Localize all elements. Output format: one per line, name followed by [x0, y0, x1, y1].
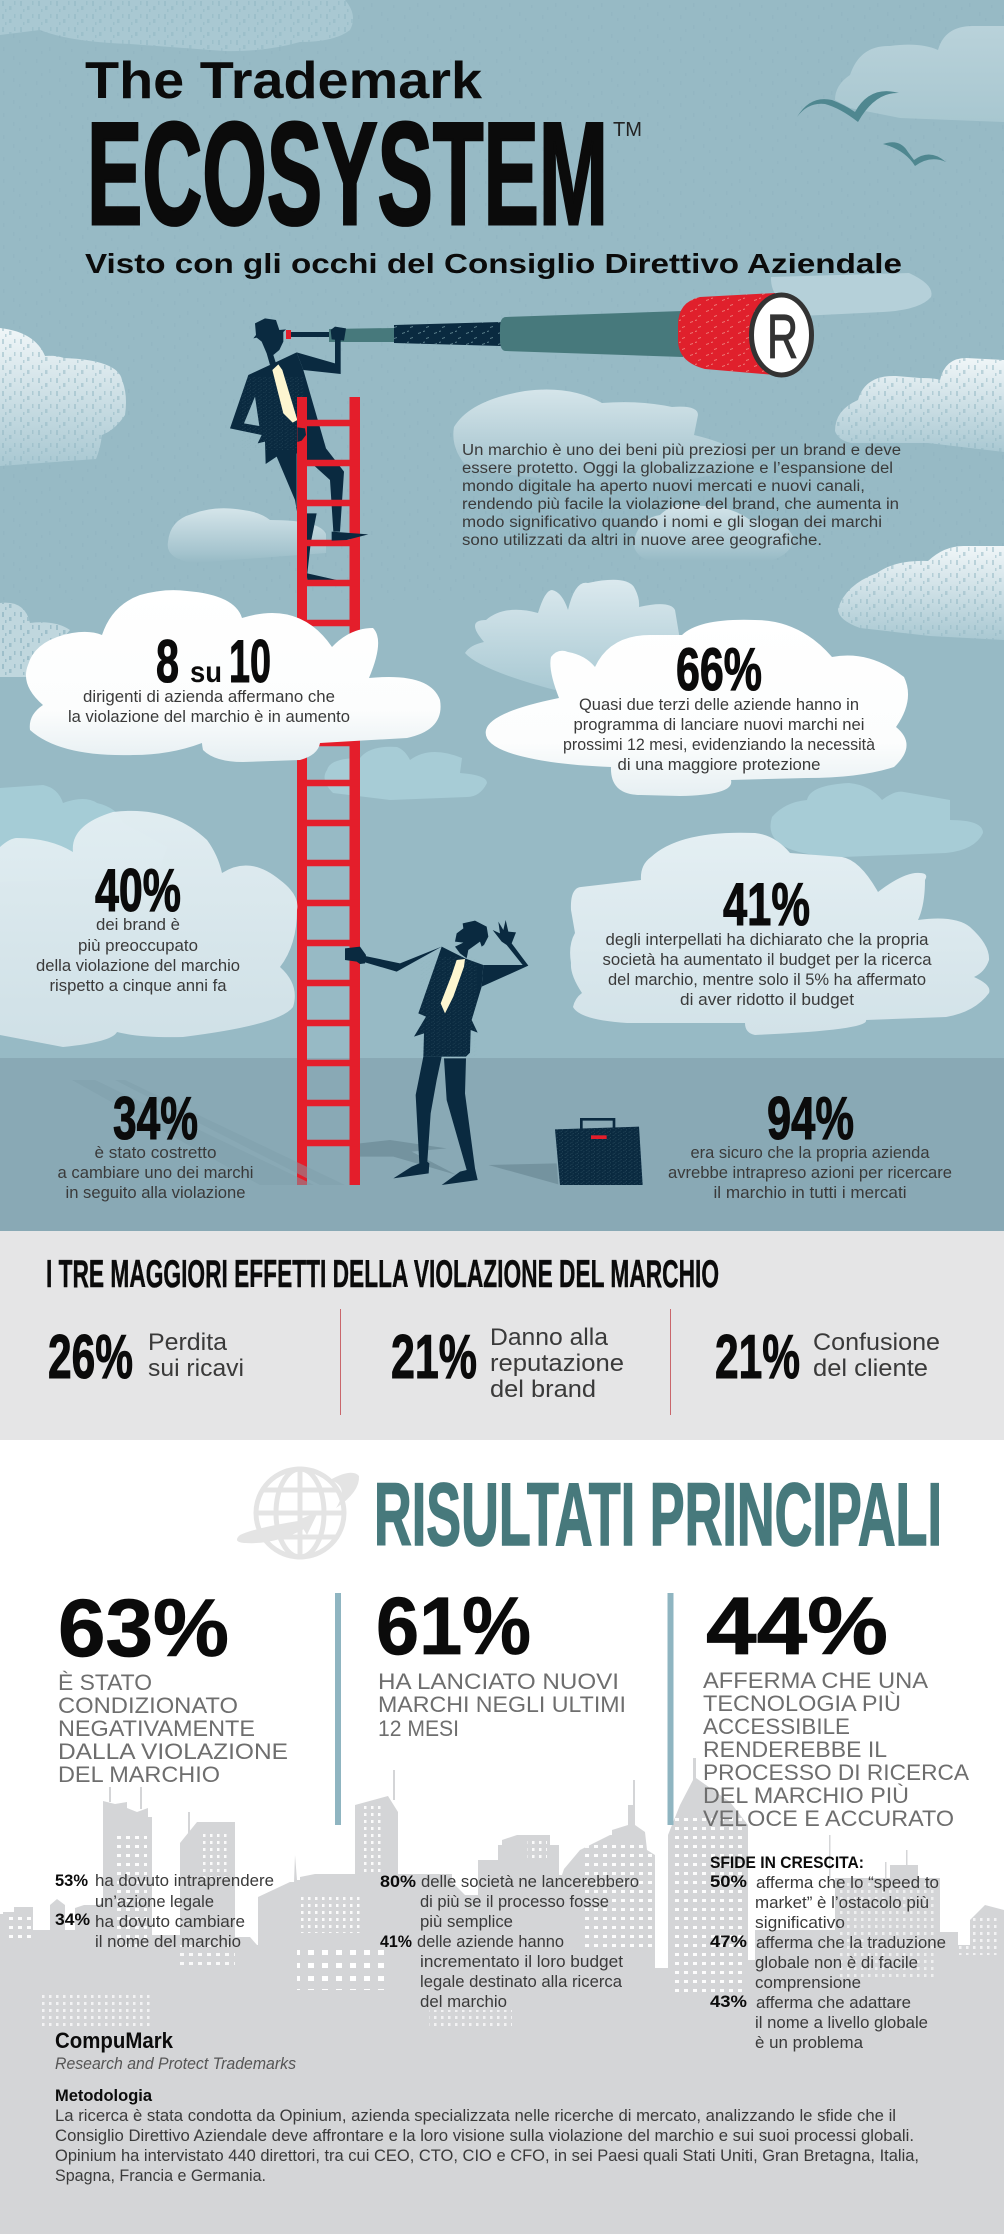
details: launches and budget: 41%: [380, 1933, 412, 1951]
man shadow: [360, 1140, 558, 1184]
column: 44 percent: DEL MARCHIO PIÙ: [703, 1783, 909, 1808]
column: 63 percent: [58, 1583, 288, 1787]
hand on ladder: [345, 947, 366, 964]
briefcase handle: [581, 1119, 614, 1129]
column: 63 percent: NEGATIVAMENTE: [58, 1716, 255, 1741]
hand on ladder: [297, 427, 306, 442]
cloud: pale behind ladder: [325, 747, 487, 800]
foot on rung: [332, 532, 368, 541]
stat: 66 percent: Quasi due terzi delle aziende hanno in: [579, 696, 859, 714]
stat: 41 percent: degli interpellati ha dichiarato che la propria: [606, 931, 929, 949]
man with telescope: [230, 318, 346, 580]
column dividers: [335, 1593, 674, 1825]
red barrel: [678, 293, 775, 375]
raised arm: [297, 339, 341, 374]
cloud: right middle: [835, 358, 1004, 452]
ladder rails: [297, 397, 360, 1185]
title block: [85, 52, 902, 279]
bird: large: [797, 91, 899, 122]
stat: 8 su 10: 8: [156, 628, 179, 695]
white results background: [0, 1440, 1004, 2234]
cloud: 40 percent: [0, 811, 297, 1047]
details: launches and budget: legale destinato alla ricerca: [420, 1973, 623, 1991]
registered letter: R: [767, 303, 798, 372]
details: growing challenges: afferma che adattare: [756, 1994, 911, 2012]
details: growing challenges: globale non è di facile: [755, 1954, 918, 1972]
column: 63 percent: DEL MARCHIO: [58, 1762, 220, 1787]
stat: 8 su 10: dirigenti di azienda affermano che: [83, 688, 335, 706]
details: growing challenges: 50%: [710, 1873, 747, 1891]
cloud: left side: [0, 328, 126, 466]
effect: reputation damage: del brand: [490, 1376, 596, 1403]
column: 44 percent: VELOCE E ACCURATO: [703, 1806, 954, 1831]
stat: 66 percent: programma di lanciare nuovi marchi nei: [574, 716, 864, 734]
stat: 40 percent: più preoccupato: [78, 937, 198, 955]
effect: revenue loss: [48, 1323, 244, 1392]
logo: CompuMark: CompuMark: [55, 2028, 174, 2053]
column: 44 percent: 44%: [706, 1581, 888, 1672]
details: launches and budget: [380, 1873, 639, 2011]
methodology: La ricerca è stata condotta da Opinium, azienda specializzata nelle ricerche di mercato, analizzando le sfide che il: [55, 2107, 896, 2125]
stat: 40 percent: 40%: [95, 857, 181, 924]
first man foot and hand over ladder: [297, 427, 368, 541]
effect: revenue loss: 26%: [48, 1323, 133, 1392]
tube segment 2: [394, 322, 501, 346]
stat: 94 percent: 94%: [767, 1085, 854, 1152]
effect: revenue loss: sui ricavi: [148, 1355, 244, 1382]
details: launches and budget: più semplice: [420, 1913, 513, 1931]
stat: 94 percent: il marchio in tutti i mercati: [714, 1184, 906, 1202]
divider: [670, 1309, 671, 1415]
intro paragraph: modo significativo quando i nomi e gli slogan dei marchi: [462, 514, 882, 531]
stat: 41 percent: società ha aumentato il budget per la ricerca: [602, 951, 932, 969]
stat: 8 su 10: [68, 628, 350, 726]
column: 61 percent: 61%: [376, 1581, 531, 1672]
briefcase: [555, 1127, 643, 1185]
icon: globe: [237, 1469, 359, 1557]
effect: customer confusion: 21%: [715, 1323, 800, 1392]
legs: [393, 1057, 478, 1185]
details: growing challenges: afferma che lo “speed to: [756, 1874, 939, 1892]
cloud: behind 66 percent: [465, 580, 680, 690]
stat: 66 percent: 66%: [676, 636, 762, 703]
stat: 34 percent: 34%: [113, 1085, 198, 1152]
details: growing challenges: SFIDE IN CRESCITA:: [710, 1854, 864, 1872]
details: growing challenges: significativo: [755, 1914, 845, 1932]
column: 61 percent: MARCHI NEGLI ULTIMI: [378, 1692, 626, 1717]
cloud: under subtitle: [771, 273, 932, 316]
details: launches and budget: 80%: [380, 1873, 416, 1891]
background clouds: [0, 0, 1004, 882]
intro paragraph: mondo digitale ha aperto nuovi mercati e nuovi canali,: [462, 478, 865, 495]
intro paragraph: Un marchio è uno dei beni più preziosi per un brand e deve: [462, 442, 901, 459]
briefcase clasp: [591, 1135, 607, 1139]
ladder rungs: [297, 423, 360, 1143]
logo: CompuMark: [55, 2028, 296, 2073]
ladder: [297, 397, 360, 1185]
stat: 40 percent: [36, 857, 240, 995]
orbit upper: [330, 1473, 359, 1508]
stat: 41 percent: [602, 871, 932, 1009]
cloud: behind paragraph: [453, 390, 736, 490]
eyepiece: [286, 330, 291, 339]
stat: 66 percent: di una maggiore protezione: [618, 756, 820, 774]
details: growing challenges: il nome a livello globale: [755, 2014, 928, 2032]
tube segment 3: [500, 311, 683, 357]
intro paragraph: rendendo più facile la violazione del brand, che aumenta in: [462, 496, 899, 513]
orbit lower and arrow: [237, 1512, 318, 1543]
antennas: [109, 1770, 908, 1878]
details: legal action: ha dovuto cambiare: [95, 1913, 245, 1931]
details: growing challenges: comprensione: [755, 1974, 861, 1992]
stat: 8 su 10: 10: [229, 628, 271, 695]
birds: [797, 91, 946, 166]
raised hand and arm: [482, 920, 528, 987]
column: 44 percent: [703, 1581, 969, 1831]
registered mark lens: [752, 295, 812, 375]
hand: [331, 327, 346, 341]
details: legal action: ha dovuto intraprendere: [95, 1872, 274, 1890]
details: legal action: un’azione legale: [95, 1893, 214, 1911]
column: 44 percent: AFFERMA CHE UNA: [703, 1668, 928, 1693]
details: growing challenges: afferma che la traduzione: [756, 1934, 946, 1952]
column: 44 percent: RENDEREBBE IL: [703, 1737, 887, 1762]
jacket and legs: [230, 352, 344, 580]
methodology: Metodologia: [55, 2087, 153, 2105]
effect: reputation damage: reputazione: [490, 1350, 624, 1377]
tie: [441, 959, 465, 1013]
stat: 66 percent: prossimi 12 mesi, evidenziando la necessità: [563, 736, 876, 754]
building windows: [7, 1805, 998, 2027]
effect: customer confusion: [715, 1323, 940, 1392]
details: growing challenges: [710, 1854, 946, 2052]
column: 61 percent: HA LANCIATO NUOVI: [378, 1669, 619, 1694]
left arm: [365, 947, 442, 972]
details: growing challenges: è un problema: [755, 2034, 864, 2052]
tube segment 1: [329, 328, 394, 342]
column: 63 percent: È STATO: [58, 1670, 152, 1695]
effect: customer confusion: Confusione: [813, 1329, 940, 1356]
effect: reputation damage: Danno alla: [490, 1324, 609, 1351]
stat: 40 percent: dei brand è: [96, 916, 180, 934]
methodology: Opinium ha intervistato 440 direttori, tra cui CEO, CTO, CIO e CFO, in sei Paesi quali Stati Uniti, Gran Bretagna, Italia,: [55, 2147, 919, 2165]
stat: 94 percent: avrebbe intrapreso azioni per ricercare: [668, 1164, 952, 1182]
stat: 34 percent: a cambiare uno dei marchi: [58, 1164, 254, 1182]
details: launches and budget: delle aziende hanno: [417, 1933, 564, 1951]
stat: 40 percent: della violazione del marchio: [36, 957, 240, 975]
details: legal action: 34%: [55, 1911, 90, 1929]
hat and head: [455, 921, 488, 958]
trademark sign: TM: [613, 119, 642, 141]
bird: small: [883, 142, 946, 166]
ladder shadow: [72, 1080, 345, 1185]
details: legal action: [55, 1872, 274, 1951]
effect: customer confusion: del cliente: [813, 1355, 928, 1382]
cloud: 41 percent: [570, 833, 989, 1035]
column: 44 percent: PROCESSO DI RICERCA: [703, 1760, 969, 1785]
stat: 94 percent: [668, 1085, 952, 1202]
column: 44 percent: ACCESSIBILE: [703, 1714, 850, 1739]
city skyline: [0, 1758, 1004, 2234]
methodology: Consiglio Direttivo Aziendale deve affrontare e la loro visione sulla violazione del marchio e sui suoi processi globali.: [55, 2127, 914, 2145]
cloud: below paragraph: [634, 504, 794, 561]
logo: CompuMark: Research and Protect Trademarks: [55, 2054, 296, 2073]
telescope: [286, 293, 812, 375]
details: launches and budget: incrementato il loro budget: [420, 1953, 623, 1971]
cloud: top left: [0, 0, 353, 51]
effect: reputation damage: 21%: [391, 1323, 477, 1392]
sky texture: [0, 0, 1004, 600]
subtitle: Visto con gli occhi del Consiglio Direttivo Aziendale: [85, 248, 902, 279]
column: 44 percent: TECNOLOGIA PIÙ: [703, 1691, 901, 1716]
cloud: right lower: [838, 546, 1004, 640]
title line 1: The Trademark: [85, 52, 482, 110]
stat: 41 percent: di aver ridotto il budget: [680, 991, 854, 1009]
intro paragraph: sono utilizzati da altri in nuove aree geografiche.: [462, 532, 822, 549]
stat: 40 percent: rispetto a cinque anni fa: [50, 977, 227, 995]
stat: 41 percent: del marchio, mentre solo il 5% ha affermato: [608, 971, 926, 989]
cloud: upper right: [835, 26, 1004, 122]
cloud: 8 su 10: [26, 590, 441, 762]
ground band: [0, 1058, 1004, 1231]
stat: 34 percent: è stato costretto: [94, 1144, 216, 1162]
cloud: left small: [0, 603, 70, 677]
arm gap: [244, 397, 259, 426]
torso: [414, 947, 483, 1057]
title line 2: ECOSYSTEM: [87, 92, 608, 255]
details: launches and budget: del marchio: [420, 1993, 507, 2011]
tie: [272, 364, 297, 423]
effect: reputation damage: [391, 1323, 624, 1403]
man gesturing: [345, 920, 643, 1185]
column: 61 percent: 12 MESI: [378, 1716, 459, 1741]
stat: 34 percent: in seguito alla violazione: [66, 1184, 246, 1202]
hat and head: [253, 318, 286, 365]
methodology: [55, 2087, 919, 2185]
details: growing challenges: 47%: [710, 1933, 747, 1951]
cloud: pale left: [0, 785, 167, 882]
details: growing challenges: market” è l’ostacolo più: [755, 1894, 929, 1912]
stat: 8 su 10: su: [190, 656, 222, 689]
divider: [340, 1309, 341, 1415]
stat: 34 percent: [58, 1085, 254, 1202]
details: launches and budget: di più se il processo fosse: [420, 1893, 609, 1911]
details: launches and budget: delle società ne lancerebbero: [421, 1873, 639, 1891]
stat: 8 su 10: la violazione del marchio è in aumento: [68, 708, 350, 726]
details: growing challenges: 43%: [710, 1993, 747, 2011]
panel: top three effects: [0, 1231, 1004, 1440]
methodology: Spagna, Francia e Germania.: [55, 2167, 266, 2185]
column: 63 percent: DALLA VIOLAZIONE: [58, 1739, 288, 1764]
column: 61 percent: [376, 1581, 626, 1741]
intro paragraph: essere protetto. Oggi la globalizzazione e l’espansione del: [462, 460, 893, 477]
column: 63 percent: CONDIZIONATO: [58, 1693, 238, 1718]
details: legal action: il nome del marchio: [95, 1933, 241, 1951]
column: 63 percent: 63%: [58, 1583, 229, 1674]
stat: 41 percent: 41%: [723, 871, 810, 938]
sky background: [0, 0, 1004, 1058]
stat: 66 percent: [563, 636, 876, 774]
effect: revenue loss: Perdita: [148, 1329, 228, 1356]
cloud: 66 percent: [486, 620, 908, 796]
intro paragraph: [462, 442, 901, 549]
details: legal action: 53%: [55, 1872, 88, 1890]
stat: 94 percent: era sicuro che la propria azienda: [690, 1144, 930, 1162]
cloud: behind first man: [168, 508, 326, 563]
cloud: pale right: [770, 783, 983, 857]
